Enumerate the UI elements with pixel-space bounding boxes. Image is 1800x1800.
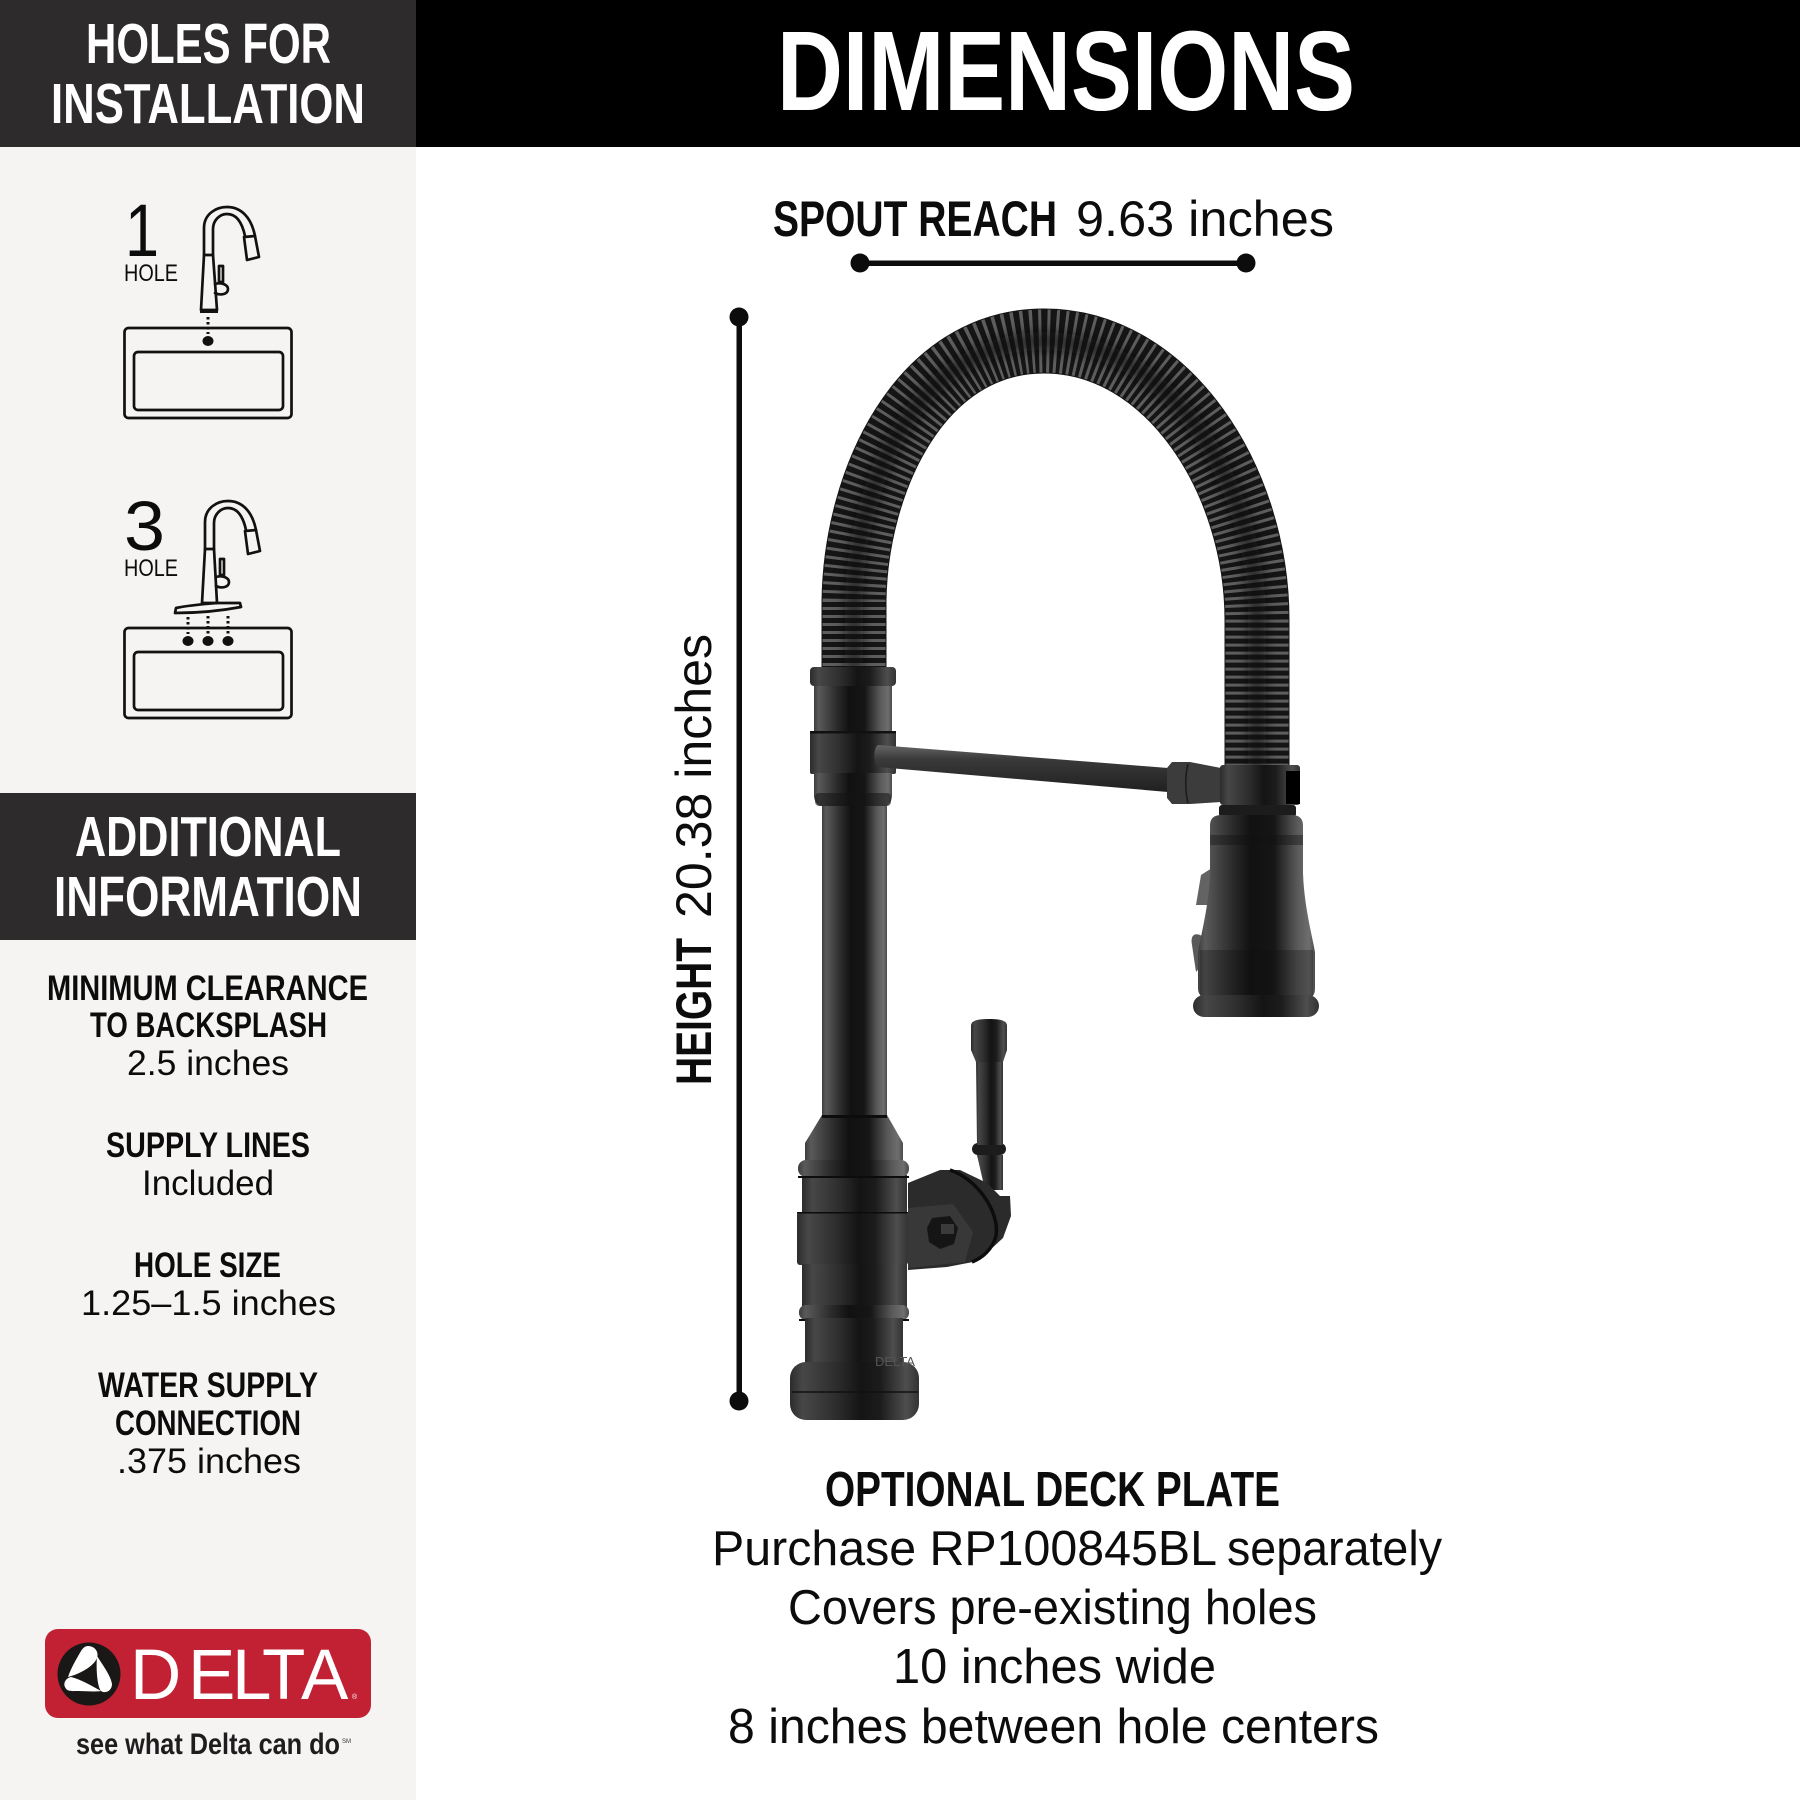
icon: three hole installation — [124, 487, 292, 718]
header: additional information: ADDITIONAL — [75, 805, 341, 869]
faucet: main column — [822, 800, 887, 1120]
text block: water supply connection: CONNECTION — [115, 1404, 301, 1443]
header: dimensions banner — [416, 0, 1800, 147]
text block: water supply connection: .375 inches — [117, 1442, 301, 1481]
text block: optional deck plate: OPTIONAL DECK PLATE — [825, 1463, 1280, 1517]
text block: optional deck plate: 8 inches between hole centers — [728, 1700, 1379, 1754]
header: holes for installation: HOLES FOR — [86, 12, 331, 76]
faucet: base body — [790, 1115, 919, 1420]
logo: delta — [45, 1629, 371, 1761]
text block: minimum clearance: MINIMUM CLEARANCE — [47, 969, 368, 1008]
panel: left sidebar background — [0, 0, 416, 1800]
label: height: HEIGHT — [666, 938, 722, 1085]
header: holes for installation: INSTALLATION — [51, 72, 365, 136]
text block: supply lines: SUPPLY LINES — [106, 1126, 310, 1165]
header: additional information: INFORMATION — [54, 865, 362, 929]
text block: hole size — [81, 1246, 336, 1323]
label: spout reach — [773, 191, 1334, 247]
text block: hole size: HOLE SIZE — [134, 1246, 281, 1285]
faucet: arm clamp and sprayer mount — [1167, 762, 1300, 817]
arrow: spout reach dimension line — [850, 254, 1256, 272]
text block: minimum clearance — [47, 969, 368, 1083]
label: height — [666, 634, 722, 1085]
text block: optional deck plate: Covers pre-existing holes — [788, 1581, 1317, 1635]
faucet: handle hub and bolt — [908, 1170, 1011, 1270]
header: holes for installation — [0, 0, 416, 147]
icon: one hole installation: HOLE — [124, 260, 178, 287]
text block: hole size: 1.25–1.5 inches — [81, 1284, 336, 1323]
faucet: handle lever — [971, 1019, 1007, 1190]
faucet: upper collar — [810, 667, 896, 806]
text block: water supply connection: WATER SUPPLY — [98, 1366, 318, 1405]
icon: three hole installation: HOLE — [124, 555, 178, 582]
label: spout reach: SPOUT REACH — [773, 191, 1057, 247]
text block: minimum clearance: 2.5 inches — [127, 1044, 289, 1083]
text block: optional deck plate: Purchase RP100845BL — [712, 1522, 1217, 1576]
header: dimensions banner: DIMENSIONS — [777, 8, 1355, 134]
icon: one hole installation — [124, 189, 292, 418]
icon: one hole installation: 1 — [125, 189, 159, 272]
label: spout reach: 9.63 inches — [1076, 191, 1334, 247]
illustration: pull-down kitchen faucet — [790, 341, 1319, 1420]
text block: optional deck plate: 10 inches wide — [893, 1640, 1216, 1694]
text block: optional deck plate — [712, 1463, 1442, 1754]
logo: delta: see what Delta can do — [76, 1728, 340, 1761]
faucet: spray head — [1192, 815, 1319, 1017]
text block: minimum clearance: TO BACKSPLASH — [90, 1006, 327, 1045]
logo: delta: DELTA — [130, 1636, 349, 1715]
text block: supply lines: Included — [142, 1164, 274, 1203]
faucet: coiled spring hose — [854, 341, 1257, 772]
faucet: base body: DELTA — [875, 1354, 915, 1369]
logo: delta: SM — [342, 1739, 351, 1745]
faucet: support arm — [874, 745, 1168, 792]
text block: optional deck plate: separately — [1227, 1522, 1442, 1576]
text block: supply lines — [106, 1126, 310, 1203]
logo: delta: ® — [352, 1693, 358, 1701]
icon: three hole installation: 3 — [124, 487, 165, 565]
header: additional information — [0, 793, 416, 940]
arrow: height dimension line — [730, 308, 748, 1410]
label: height: 20.38 inches — [666, 634, 722, 918]
text block: water supply connection — [98, 1366, 318, 1481]
